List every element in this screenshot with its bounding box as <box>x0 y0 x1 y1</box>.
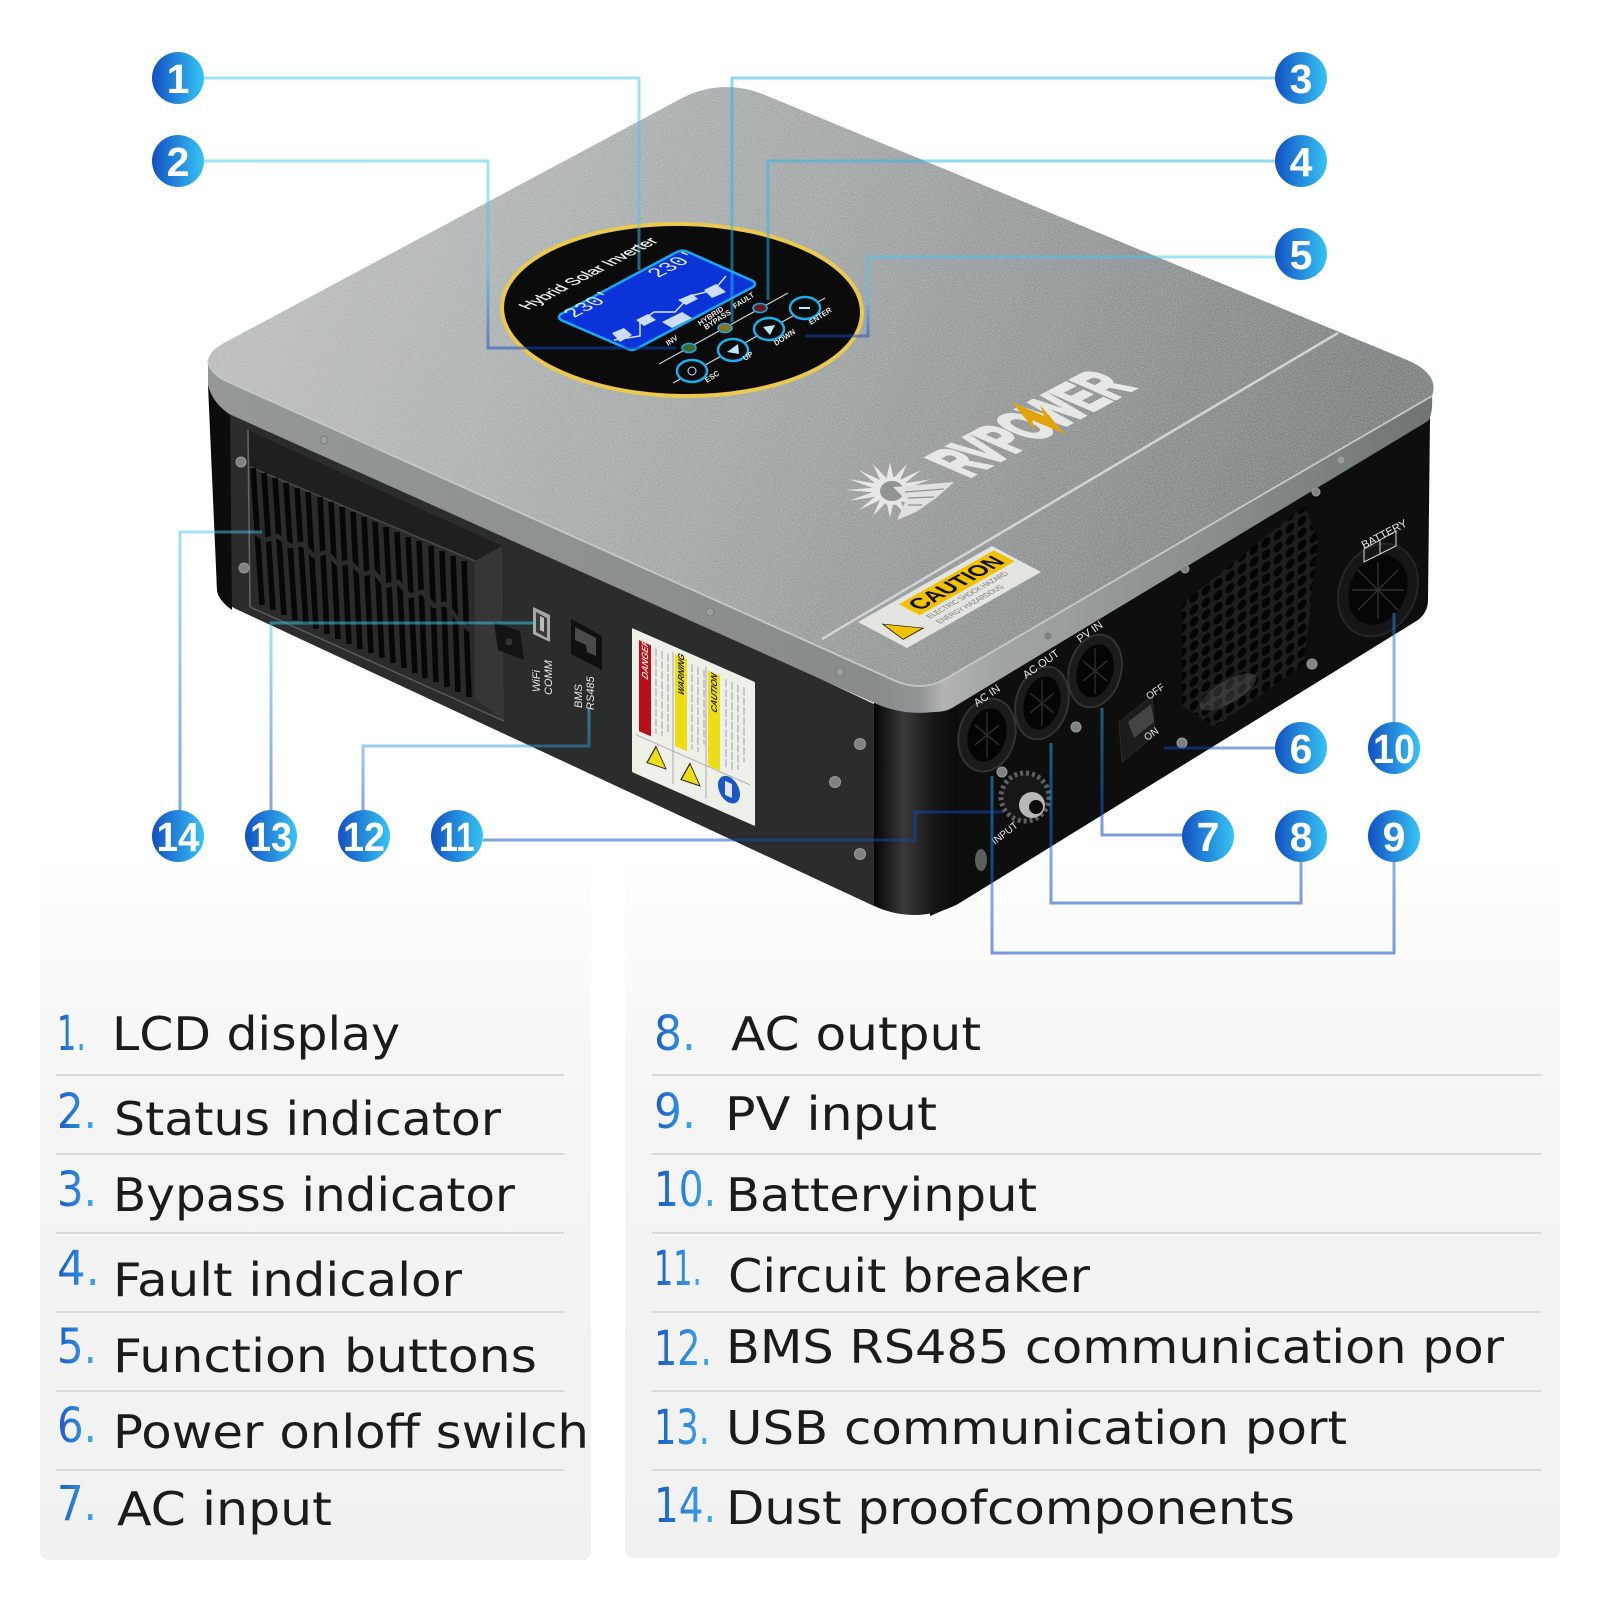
legend item 12: 12. <box>654 1321 712 1377</box>
leader line 3 <box>732 78 1275 322</box>
badge 2 <box>152 135 204 187</box>
leader line 4 <box>768 161 1275 300</box>
caution sticker: CAUTION <box>903 553 1011 614</box>
mounting bracket <box>494 622 524 660</box>
button and LED captions: BYPASS <box>702 308 732 332</box>
leader line 10 <box>1392 613 1396 722</box>
legend item 10: Batteryinput <box>726 1168 1037 1222</box>
panel: right legend background <box>625 850 1560 1558</box>
caution sticker: ENERGY HAZARDOUS <box>933 584 1006 625</box>
button and LED captions <box>664 290 834 385</box>
front corner pillar <box>874 702 958 915</box>
legend item 1: 1. <box>57 1006 86 1062</box>
inverter device illustration <box>208 87 1434 916</box>
legend item 2: 2. <box>57 1084 97 1140</box>
ground screw <box>975 849 987 871</box>
badge 6: 6 <box>1290 726 1312 772</box>
legend item 4: 4. <box>57 1241 100 1297</box>
legend item 5: 5. <box>57 1319 97 1375</box>
LCD readouts: 230' <box>643 249 708 281</box>
panel title: Hybrid Solar Inverter <box>514 235 663 312</box>
badge 6 <box>1275 722 1327 774</box>
port labels: INPUT <box>990 820 1020 847</box>
legend item 8: AC output <box>731 1007 981 1061</box>
badge 7 <box>1182 810 1234 862</box>
badge 2: 2 <box>167 139 189 185</box>
legend item 1: LCD display <box>112 1007 400 1061</box>
leader line 14 <box>180 532 262 812</box>
port labels: AC IN <box>972 683 1003 709</box>
chassis screws on lid lip <box>320 436 1345 676</box>
legend item 10 <box>654 1162 1037 1222</box>
left corner pillar <box>208 385 232 610</box>
power switch: OFF <box>1144 682 1167 702</box>
USB port <box>533 607 550 642</box>
badge 12: 12 <box>343 814 385 860</box>
lid top surface <box>208 87 1434 686</box>
legend item 4: Fault indicalor <box>113 1253 462 1307</box>
right side panel <box>930 418 1430 916</box>
LCD readouts: 230' <box>559 289 624 321</box>
leader line 7 <box>1102 708 1182 835</box>
badge 1 <box>152 52 204 104</box>
leader line 8 <box>1051 743 1301 903</box>
WiFi COMM label: COMM <box>543 659 555 695</box>
leader line 2 <box>204 161 676 348</box>
lid edge highlight <box>208 361 1432 686</box>
badge 10: 10 <box>1373 726 1415 772</box>
panel: left legend background <box>40 850 591 1560</box>
leader line 1 <box>204 78 639 270</box>
badge 8: 8 <box>1290 814 1312 860</box>
legend item 13: USB communication port <box>726 1401 1347 1455</box>
legend item 14: 14. <box>654 1478 716 1534</box>
legend item 2: Status indicator <box>114 1092 501 1146</box>
badge 9 <box>1368 810 1420 862</box>
badge 3: 3 <box>1290 56 1312 102</box>
dust proof vent grille <box>248 430 504 721</box>
brand logo sun <box>846 462 954 520</box>
cooling fan mesh <box>1182 506 1318 727</box>
legend item 4 <box>57 1241 462 1307</box>
badge 9: 9 <box>1383 814 1405 860</box>
legend item 13: 13. <box>654 1400 710 1456</box>
ports: AC OUT <box>1007 661 1077 745</box>
badge 4: 4 <box>1290 139 1313 185</box>
leader line 9 <box>992 776 1394 953</box>
chassis screws on black panels <box>236 457 1320 860</box>
legend item 9: 9. <box>654 1084 696 1140</box>
battery port <box>1323 517 1433 650</box>
leader line 12 <box>363 709 589 810</box>
legend item 7: AC input <box>117 1482 332 1536</box>
power switch: ON <box>1142 726 1161 743</box>
legend item 5 <box>57 1319 537 1383</box>
LCD icon blocks <box>612 284 726 342</box>
control panel <box>501 221 863 399</box>
legend item 14: Dust proofcomponents <box>726 1481 1295 1535</box>
warning sticker <box>632 628 755 826</box>
badge 3 <box>1275 52 1327 104</box>
power switch <box>1119 682 1167 762</box>
battery port: BATTERY <box>1360 517 1410 552</box>
legend item 6: 6. <box>57 1398 97 1454</box>
badge 4 <box>1275 135 1327 187</box>
badge 5: 5 <box>1290 232 1312 278</box>
LCD screen <box>559 251 755 350</box>
warning sticker: CAUTION <box>709 671 719 714</box>
legend item 7: 7. <box>57 1476 97 1532</box>
legend item 7 <box>57 1476 332 1536</box>
legend item 11: Circuit breaker <box>728 1249 1090 1303</box>
legend item 5: Function buttons <box>113 1329 537 1383</box>
button and LED captions: UP <box>741 349 755 363</box>
legend item 3: 3. <box>57 1162 97 1218</box>
legend item 8 <box>654 1006 981 1062</box>
button and LED captions: FAULT <box>731 290 756 311</box>
BMS RS485 label: BMS <box>573 684 585 708</box>
leader line 13 <box>271 623 535 810</box>
circuit breaker <box>1001 773 1049 821</box>
legend item 11 <box>654 1241 1090 1303</box>
leader line 11 <box>483 812 1003 840</box>
lid seam line <box>822 333 1338 639</box>
brand logo wordmark: RVPOWER <box>911 363 1150 484</box>
button and LED captions: HYBRID <box>696 304 726 328</box>
button and LED captions: INV <box>664 333 680 348</box>
warning sticker: DANGER <box>639 637 650 681</box>
button rail <box>673 298 825 383</box>
LCD readouts <box>559 249 708 321</box>
legend item 3: Bypass indicator <box>113 1168 515 1222</box>
badge 11: 11 <box>439 814 475 860</box>
legend item 12: BMS RS485 communication por <box>726 1320 1504 1374</box>
warning sticker: WARNING <box>676 651 686 697</box>
badge 8 <box>1275 810 1327 862</box>
badge 1: 1 <box>167 56 189 102</box>
badge 13: 13 <box>250 814 292 860</box>
port labels: AC OUT <box>1021 648 1062 681</box>
badge 5 <box>1275 228 1327 280</box>
legend item 9: PV input <box>725 1087 937 1141</box>
legend item 8: 8. <box>654 1006 696 1062</box>
ports: PV IN <box>1060 629 1130 713</box>
legend item 10: 10. <box>654 1162 716 1218</box>
button and LED captions: DOWN <box>772 327 797 348</box>
leader line 6 <box>1164 746 1275 750</box>
button glyphs <box>688 307 810 375</box>
legend item 9 <box>654 1084 937 1141</box>
badge 14: 14 <box>156 814 200 860</box>
LCD power-flow icons <box>614 276 726 340</box>
indicator LEDs <box>682 304 767 352</box>
WiFi COMM label: WiFi <box>531 670 543 692</box>
gold ringed black disc <box>501 221 863 399</box>
function buttons <box>677 297 820 382</box>
legend item 6: Power onloff swilch <box>113 1405 589 1459</box>
lid surface grain <box>208 87 1434 686</box>
badge 7: 7 <box>1197 814 1219 860</box>
BMS RS485 label: RS485 <box>585 675 597 710</box>
RJ45 port <box>571 619 602 670</box>
left side panel <box>210 392 874 906</box>
port labels <box>972 619 1105 847</box>
button and LED captions: ESC <box>703 368 722 385</box>
caution sticker <box>858 546 1041 648</box>
caution sticker: ELECTRIC SHOCK HAZARD <box>924 570 1011 620</box>
indicator rail <box>659 293 788 364</box>
ports: AC IN <box>950 692 1024 778</box>
legend item 11: 11. <box>654 1241 702 1297</box>
port labels: PV IN <box>1075 619 1105 645</box>
metal lip of the lid <box>208 300 1432 713</box>
button and LED captions: ENTER <box>807 305 834 327</box>
leader line 5 <box>805 257 1275 336</box>
